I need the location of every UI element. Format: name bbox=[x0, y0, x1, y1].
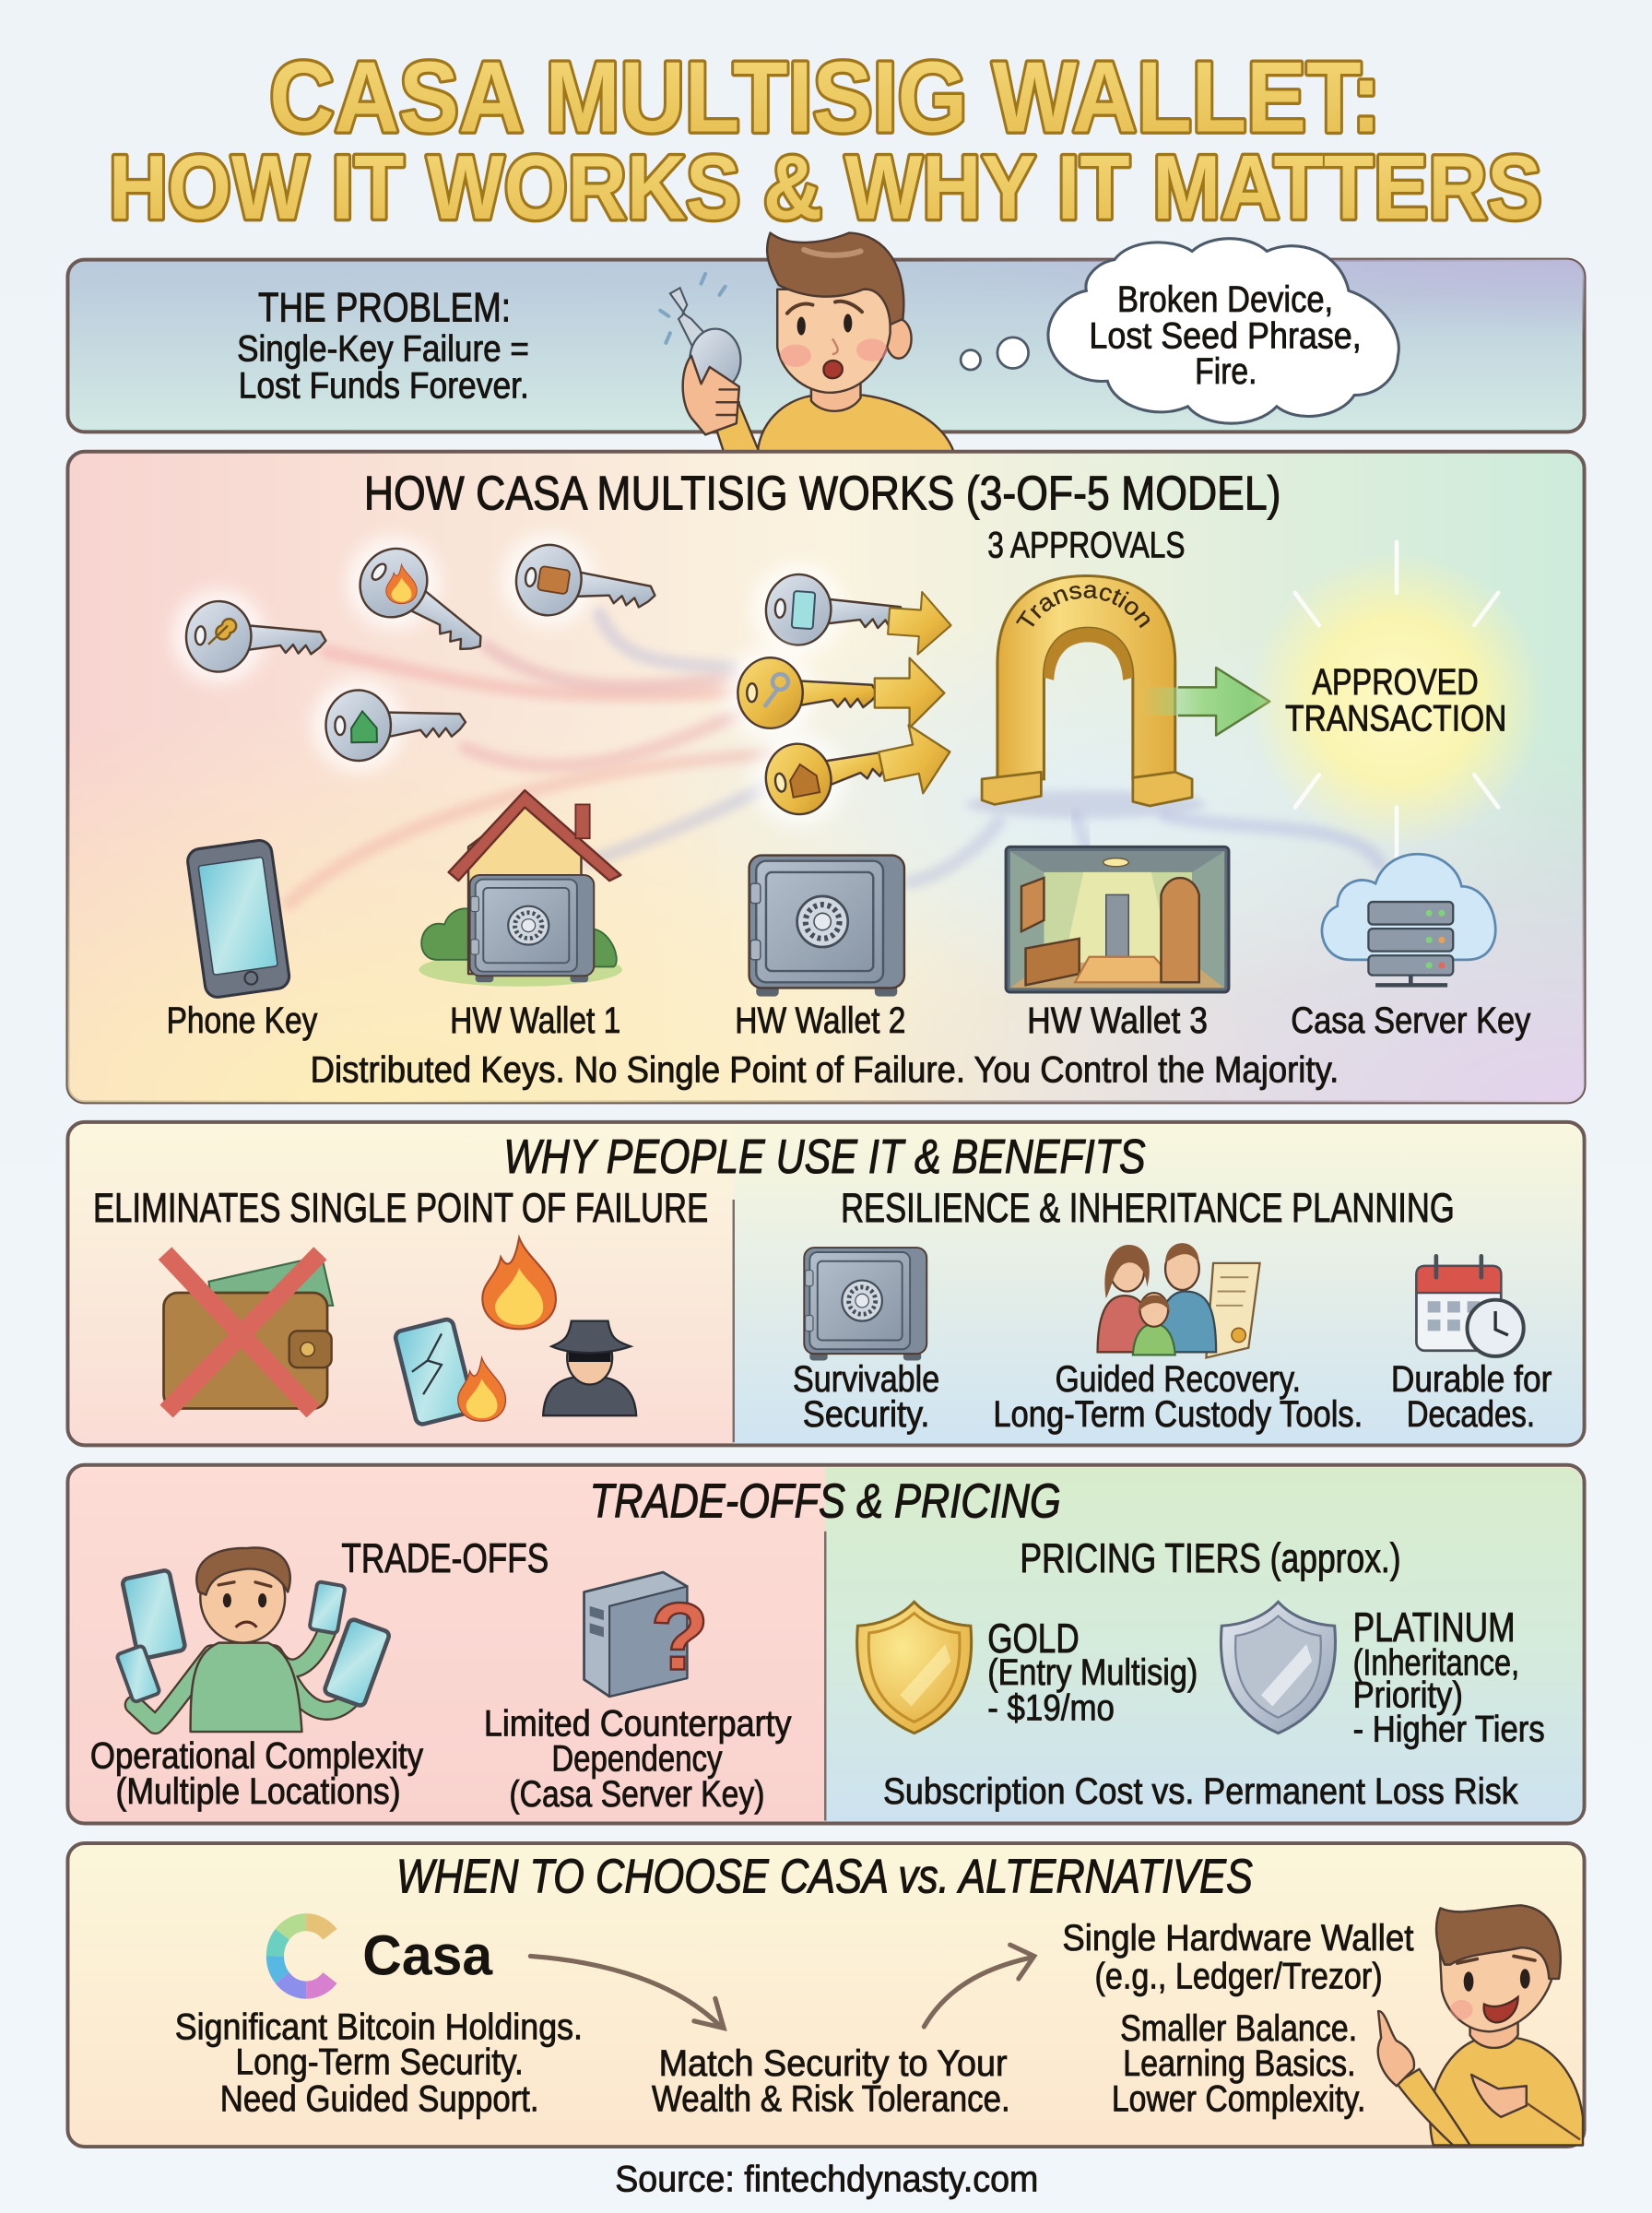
platinum tier text: - Higher Tiers bbox=[1353, 1709, 1545, 1749]
icon: gold shield bbox=[857, 1602, 972, 1734]
icon: crossed-out wallet bbox=[164, 1253, 333, 1412]
problem statement text: THE PROBLEM: bbox=[258, 286, 511, 331]
icon: golden transaction arch bbox=[968, 574, 1206, 821]
title: CASA MULTISIG WALLET: bbox=[269, 41, 1381, 153]
arrow outline bbox=[1178, 668, 1269, 735]
arrow: approved output bbox=[1139, 668, 1269, 735]
icon: unused keys cluster bbox=[170, 517, 662, 773]
panel: why people use it and benefits bbox=[67, 1122, 1585, 1445]
icon: secure room, HW wallet 3 bbox=[1006, 846, 1229, 992]
trade-off captions: Limited Counterparty bbox=[484, 1703, 792, 1744]
gold tier text: - $19/mo bbox=[987, 1688, 1115, 1729]
title bbox=[109, 41, 1542, 238]
platinum tier text: PLATINUM bbox=[1353, 1605, 1516, 1651]
platinum tier text: (Inheritance, bbox=[1353, 1643, 1519, 1684]
icon: house with safe, HW wallet 1 bbox=[419, 790, 622, 987]
pricing note: Subscription Cost vs. Permanent Loss Risk bbox=[883, 1771, 1518, 1812]
trade-off captions: (Multiple Locations) bbox=[115, 1771, 401, 1812]
icon: server with question mark: ? bbox=[650, 1584, 709, 1691]
panel: when to choose Casa vs. alternatives bbox=[67, 1843, 1585, 2147]
approved transaction sunburst: APPROVED bbox=[1312, 662, 1479, 703]
gold tier text bbox=[987, 1616, 1198, 1729]
trade-off captions bbox=[90, 1703, 792, 1815]
source line: Source: fintechdynasty.com bbox=[615, 2160, 1038, 2200]
icon: broken tablet with fire bbox=[395, 1318, 505, 1426]
icon: flame bbox=[482, 1237, 556, 1329]
benefit captions: Guided Recovery. bbox=[1056, 1359, 1301, 1400]
caption: Distributed Keys. No Single Point of Failure. You Control the Majority. bbox=[311, 1050, 1339, 1091]
labels: key locations: Casa Server Key bbox=[1291, 1000, 1530, 1041]
label: 3 approvals: 3 APPROVALS bbox=[987, 525, 1185, 565]
gold tier text: (Entry Multisig) bbox=[987, 1652, 1198, 1693]
problem statement text bbox=[237, 286, 529, 406]
benefit captions: Survivable bbox=[793, 1359, 939, 1400]
icon: server with question mark bbox=[584, 1572, 709, 1697]
approved transaction sunburst bbox=[1248, 542, 1545, 858]
icon: platinum shield bbox=[1221, 1602, 1336, 1734]
benefit captions: Durable for bbox=[1391, 1359, 1552, 1400]
title: HOW IT WORKS & WHY IT MATTERS bbox=[109, 136, 1542, 238]
benefit captions: Decades. bbox=[1407, 1394, 1535, 1435]
subheading: trade-offs: TRADE-OFFS bbox=[341, 1536, 549, 1581]
thought cloud: Broken Device, bbox=[1117, 279, 1333, 320]
labels: key locations: HW Wallet 2 bbox=[735, 1000, 905, 1041]
thought cloud: Lost Seed Phrase, bbox=[1089, 316, 1362, 357]
icon: safe, HW wallet 2 bbox=[749, 856, 904, 997]
Casa criteria text: Long-Term Security. bbox=[236, 2042, 524, 2083]
arrow: Casa to match bbox=[530, 1956, 724, 2028]
icon: golden transaction arch: Transaction bbox=[1016, 585, 1150, 629]
icon: pointing person bbox=[1378, 1905, 1583, 2146]
gold tier text: GOLD bbox=[987, 1616, 1080, 1662]
single hardware wallet text bbox=[1062, 1918, 1413, 2119]
subheading: eliminates single point of failure: ELIMINATES SINGLE POINT OF FAILURE bbox=[93, 1186, 708, 1231]
Casa logo bbox=[275, 1923, 493, 1990]
Casa criteria text: Significant Bitcoin Holdings. bbox=[175, 2006, 583, 2047]
icon: cloud server, Casa server key bbox=[1322, 854, 1495, 985]
problem statement text: Single-Key Failure = bbox=[237, 329, 529, 370]
trade-off captions: Dependency bbox=[551, 1739, 723, 1780]
subheading: resilience and inheritance planning: RESILIENCE & INHERITANCE PLANNING bbox=[841, 1186, 1455, 1231]
labels: key locations: HW Wallet 3 bbox=[1027, 1000, 1208, 1041]
trade-off captions: (Casa Server Key) bbox=[509, 1774, 764, 1815]
panel: trade-offs and pricing bbox=[67, 1465, 1585, 1824]
approved transaction sunburst: TRANSACTION bbox=[1285, 699, 1506, 740]
heading: WHEN TO CHOOSE CASA vs. ALTERNATIVES bbox=[396, 1851, 1253, 1904]
panel: the problem bbox=[67, 233, 1585, 452]
single hardware wallet text: (e.g., Ledger/Trezor) bbox=[1095, 1956, 1383, 1996]
thought cloud bbox=[1048, 239, 1398, 423]
Casa criteria text bbox=[175, 2006, 583, 2119]
icon: thief in hat bbox=[543, 1321, 636, 1415]
match security text: Wealth & Risk Tolerance. bbox=[652, 2078, 1010, 2119]
single hardware wallet text: Learning Basics. bbox=[1123, 2043, 1356, 2084]
match security text: Match Security to Your bbox=[659, 2043, 1008, 2084]
icon: worried person holding broken key bbox=[660, 233, 953, 452]
icon: three approved keys with arrows bbox=[723, 560, 957, 834]
labels: key locations: HW Wallet 1 bbox=[450, 1000, 620, 1041]
single hardware wallet text: Smaller Balance. bbox=[1120, 2008, 1357, 2049]
Casa logo: Casa bbox=[362, 1923, 493, 1986]
labels: key locations bbox=[167, 1000, 1530, 1041]
single hardware wallet text: Lower Complexity. bbox=[1112, 2078, 1365, 2119]
subheading: pricing tiers: PRICING TIERS (approx.) bbox=[1020, 1536, 1401, 1581]
benefit captions: Long-Term Custody Tools. bbox=[993, 1394, 1363, 1435]
heading: WHY PEOPLE USE IT & BENEFITS bbox=[503, 1130, 1146, 1184]
heading: TRADE-OFFS & PRICING bbox=[590, 1474, 1061, 1528]
match security text bbox=[652, 2043, 1010, 2119]
Casa criteria text: Need Guided Support. bbox=[220, 2078, 539, 2119]
problem statement text: Lost Funds Forever. bbox=[239, 365, 529, 406]
arrow: match to single hardware wallet bbox=[924, 1945, 1034, 2027]
icon: calendar and clock bbox=[1416, 1256, 1524, 1356]
trade-off captions: Operational Complexity bbox=[90, 1736, 423, 1777]
icon: phone key bbox=[186, 839, 290, 999]
thought bubbles bbox=[961, 337, 1029, 370]
panel: how Casa multisig works bbox=[65, 450, 1587, 1105]
flow ribbons from keys to approvals bbox=[289, 614, 1380, 904]
benefit captions bbox=[793, 1359, 1552, 1435]
benefit captions: Security. bbox=[803, 1394, 929, 1435]
thought cloud: Fire. bbox=[1195, 351, 1257, 392]
icon: person juggling devices bbox=[116, 1548, 390, 1732]
heading: HOW CASA MULTISIG WORKS (3-OF-5 MODEL) bbox=[364, 467, 1281, 521]
platinum tier text: Priority) bbox=[1353, 1675, 1463, 1716]
icon: family with inheritance scroll bbox=[1098, 1243, 1260, 1357]
labels: key locations: Phone Key bbox=[167, 1000, 317, 1041]
platinum tier text bbox=[1353, 1605, 1545, 1749]
single hardware wallet text: Single Hardware Wallet bbox=[1062, 1918, 1413, 1959]
icon: safe, survivable security bbox=[804, 1248, 926, 1361]
